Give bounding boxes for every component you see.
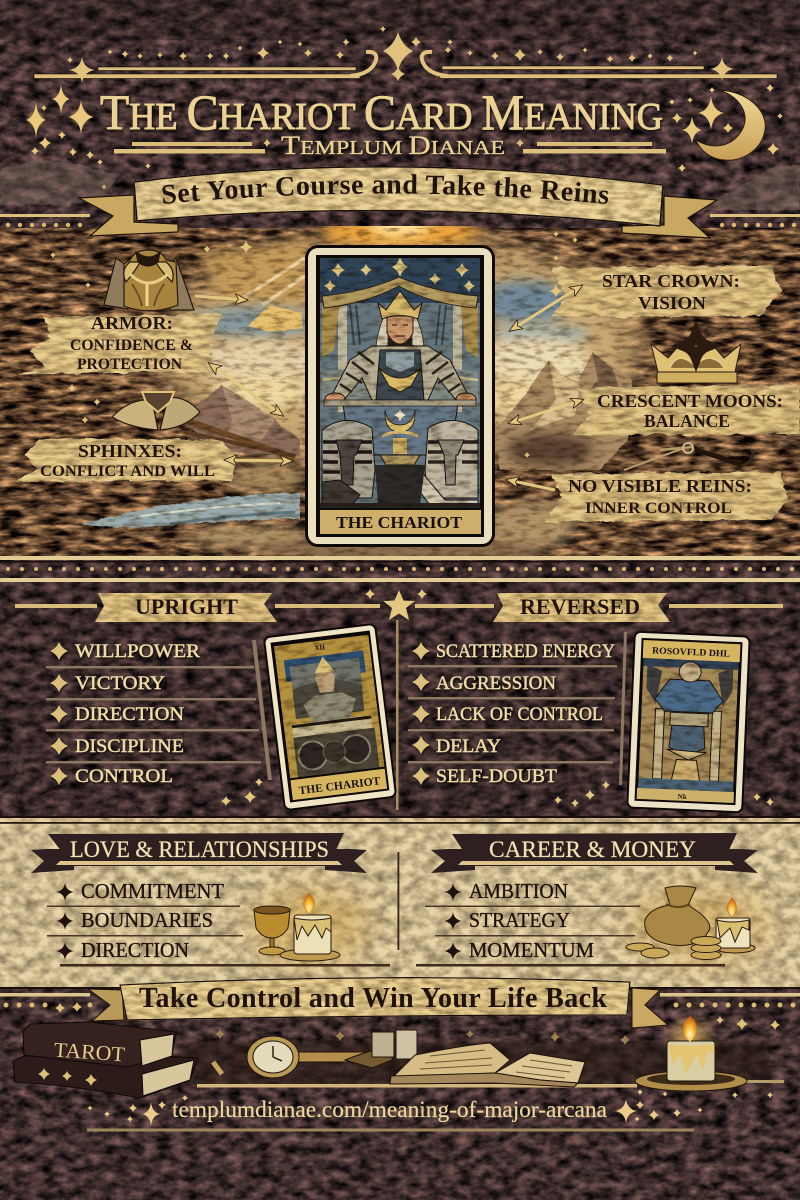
icon: key and reins xyxy=(624,443,753,470)
mountains right xyxy=(495,352,640,470)
reversed list: SCATTERED ENERGY xyxy=(436,641,615,662)
card title plate xyxy=(320,510,481,534)
pale columns and curtains xyxy=(338,302,347,412)
upright list: VICTORY xyxy=(75,673,165,694)
river xyxy=(82,493,300,527)
mountains left xyxy=(178,385,300,455)
reversed list: DELAY xyxy=(436,736,501,757)
label: crescent moons xyxy=(572,385,800,435)
icon: pauldron collar xyxy=(112,392,200,430)
label: star crown: VISION xyxy=(638,293,706,313)
label: no visible reins: INNER CONTROL xyxy=(585,500,732,517)
top ornament: scrolls, rules and stars xyxy=(34,26,777,83)
icon: coin bag, candle and coins xyxy=(626,886,755,960)
chariot body xyxy=(343,404,458,455)
shelf scene backdrop xyxy=(180,1029,784,1088)
panel: love and career parchment xyxy=(0,816,800,988)
main tarot card: The Chariot: THE CHARIOT xyxy=(336,513,463,532)
upright list xyxy=(50,641,200,787)
label: star crown: STAR CROWN: xyxy=(602,271,740,291)
hair xyxy=(376,318,424,346)
bottom banner: Take Control and Win Your Life Back: Take Control and Win Your Life Back xyxy=(139,983,607,1014)
bottom dark band trim xyxy=(0,987,800,1030)
career ribbon xyxy=(431,833,758,873)
career list: STRATEGY xyxy=(469,908,570,932)
centre star and rule xyxy=(221,589,774,810)
label: armor: PROTECTION xyxy=(77,356,182,373)
icon: open book xyxy=(390,1043,585,1087)
icon: pocket watch and key xyxy=(213,1036,392,1078)
warm haze behind card xyxy=(160,235,640,465)
label: crescent moons: BALANCE xyxy=(644,411,730,431)
grain over picture xyxy=(320,258,480,508)
career list: AMBITION xyxy=(469,879,568,903)
career ribbon: CAREER & MONEY xyxy=(489,837,696,862)
reversed list: AGGRESSION xyxy=(436,673,556,694)
tan bank beside left panel xyxy=(225,464,305,492)
upright tarot card xyxy=(263,623,397,811)
canopy xyxy=(322,277,478,308)
website url with stars xyxy=(88,1089,773,1126)
upright list: WILLPOWER xyxy=(75,641,200,662)
face xyxy=(387,316,413,344)
scene texture xyxy=(0,228,800,556)
reversed list: SELF-DOUBT xyxy=(436,766,557,787)
crown xyxy=(378,291,422,319)
icon: armor breastplate xyxy=(104,250,194,311)
career list: MOMENTUM xyxy=(469,938,594,962)
arms and armour xyxy=(332,346,468,400)
rocky plinth xyxy=(260,542,540,556)
label: no visible reins xyxy=(545,472,788,522)
label: armor xyxy=(17,313,222,374)
reversed list: LACK OF CONTROL xyxy=(436,704,603,725)
website url with stars: templumdianae.com/meaning-of-major-arcana xyxy=(172,1097,607,1122)
gold ray area left xyxy=(200,240,310,305)
love ribbon: LOVE & RELATIONSHIPS xyxy=(70,837,329,862)
light sphinx xyxy=(425,420,478,498)
dark sphinx xyxy=(322,420,375,498)
distant mountains beside title xyxy=(0,160,800,210)
main tarot card: The Chariot xyxy=(305,245,495,547)
label: sphinxes: SPHINXES: xyxy=(78,441,182,461)
subtitle with rules: TEMPLUM DIANAE xyxy=(281,131,505,160)
label: crescent moons: CRESCENT MOONS: xyxy=(597,391,783,411)
upright list: DIRECTION xyxy=(75,704,184,725)
upright tarot card: XII xyxy=(314,643,326,652)
icon: lit candle on plate xyxy=(635,1012,747,1091)
reversed tarot card: ROSOVFLD DHL xyxy=(652,646,730,660)
central scene: sky, clouds, mountains, river xyxy=(82,216,640,559)
panel: upright and reversed xyxy=(15,589,783,813)
pointer arrows xyxy=(195,286,582,490)
love ribbon xyxy=(31,833,367,873)
icon: golden crown xyxy=(651,335,741,383)
lower right ground xyxy=(484,501,576,549)
upright tarot card: THE CHARIOT xyxy=(298,775,381,797)
top banner: Set Your Course and Take the Reins: Set Your Course and Take the Reins xyxy=(162,174,608,204)
icon: twin stub candles xyxy=(372,1030,417,1059)
reversed tarot card: Nk xyxy=(678,793,687,801)
career list xyxy=(444,879,594,962)
blue clouds xyxy=(193,306,317,338)
upright ribbon xyxy=(15,593,380,622)
left star cluster xyxy=(26,84,151,190)
reversed list xyxy=(412,641,615,787)
love list: BOUNDARIES xyxy=(81,908,213,932)
hands xyxy=(324,392,346,400)
small scene stars xyxy=(50,231,578,458)
upright ribbon: UPRIGHT xyxy=(135,594,238,619)
upright list: DISCIPLINE xyxy=(75,736,184,757)
reversed tarot card xyxy=(626,631,751,813)
icon: stacked tarot books xyxy=(13,1022,198,1098)
love list: DIRECTION xyxy=(81,938,189,962)
subtitle with rules xyxy=(114,131,666,160)
bottom banner: Take Control and Win Your Life Back xyxy=(88,978,668,1028)
love list: COMMITMENT xyxy=(81,879,224,903)
label: armor: ARMOR: xyxy=(91,313,173,333)
cream clouds xyxy=(196,340,320,384)
footer rule xyxy=(87,1128,694,1132)
label: sphinxes xyxy=(14,438,236,482)
label: no visible reins: NO VISIBLE REINS: xyxy=(568,476,752,496)
top banner: Set Your Course and Take the Reins xyxy=(0,166,800,239)
reversed ribbon: REVERSED xyxy=(520,594,640,619)
label: star crown xyxy=(552,265,782,317)
love list xyxy=(56,879,224,962)
icon: stacked tarot books: TAROT xyxy=(53,1038,126,1066)
upright list: CONTROL xyxy=(75,766,173,787)
label: armor: CONFIDENCE & xyxy=(70,337,193,354)
reversed ribbon xyxy=(415,593,783,622)
section divider with dots xyxy=(0,556,800,582)
ground brush xyxy=(506,434,594,466)
night sky xyxy=(320,258,480,303)
label: sphinxes: CONFLICT AND WILL xyxy=(40,463,215,480)
icon: crescent moon with stars xyxy=(669,84,783,172)
title: THE CHARIOT CARD MEANING xyxy=(100,84,663,140)
icon: chalice and candle xyxy=(254,893,340,961)
golden rock cloud left xyxy=(248,306,302,332)
